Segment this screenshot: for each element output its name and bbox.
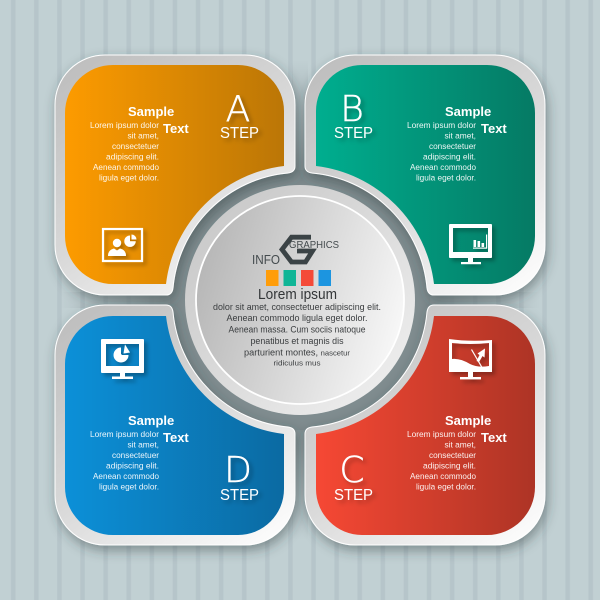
panel: step B	[305, 55, 545, 295]
logo word info: INFO	[252, 252, 280, 267]
D heading	[128, 413, 189, 445]
A body text: Aenean commodo	[93, 162, 159, 172]
central circle	[185, 185, 415, 415]
C heading: Text	[481, 430, 507, 445]
C body text: ligula eget dolor.	[416, 482, 476, 492]
A step label: STEP	[220, 125, 259, 142]
icon: monitor with arrow	[449, 339, 492, 379]
D step label: D	[224, 450, 252, 491]
B frame	[305, 55, 545, 295]
A heading	[128, 104, 189, 136]
D heading: Text	[163, 430, 189, 445]
logo: info graphics	[282, 237, 339, 262]
C step label: C	[339, 450, 365, 491]
B heading: Sample	[445, 104, 491, 119]
A step label	[220, 89, 259, 142]
D heading: Sample	[128, 413, 174, 428]
D body text: Aenean commodo	[93, 471, 159, 481]
A heading: Sample	[128, 104, 174, 119]
A heading: Text	[163, 121, 189, 136]
B body text: ligula eget dolor.	[416, 172, 476, 182]
icon: monitor with pie chart	[101, 339, 144, 379]
B body text: sit amet,	[444, 130, 476, 140]
inner disc	[196, 196, 404, 404]
panel: step D	[55, 305, 295, 545]
C step label: STEP	[334, 487, 373, 504]
D body text: adipiscing elit.	[106, 460, 159, 470]
D body text: ligula eget dolor.	[99, 482, 159, 492]
B body text: adipiscing elit.	[423, 152, 476, 162]
B body text: consectetuer	[429, 141, 476, 151]
icon: presentation board	[103, 229, 142, 261]
A body text	[90, 120, 159, 182]
A step label: A	[226, 89, 250, 130]
dark channel between panels	[60, 60, 540, 540]
C colour fill	[316, 316, 535, 535]
B colour fill	[316, 65, 535, 284]
D colour fill	[65, 316, 284, 535]
C heading	[445, 413, 507, 445]
C body text: Aenean commodo	[410, 471, 476, 481]
C body text: consectetuer	[429, 450, 476, 460]
B step label: B	[340, 89, 364, 130]
centre body text: Aenean commodo ligula eget dolor.	[226, 313, 368, 323]
A colour fill	[65, 65, 284, 284]
C body text	[407, 429, 476, 492]
D body text: consectetuer	[112, 450, 159, 460]
A body text: adipiscing elit.	[106, 152, 159, 162]
B step label: STEP	[334, 125, 373, 142]
B body text: Lorem ipsum dolor	[407, 120, 476, 130]
B heading	[445, 104, 507, 136]
C body text: sit amet,	[444, 440, 476, 450]
centre body text: dolor sit amet, consectetuer adipiscing elit.	[213, 302, 381, 312]
centre body text: parturient montes, nascetur	[244, 348, 350, 358]
D step label	[220, 450, 259, 504]
D step label: STEP	[220, 487, 259, 504]
D body text: sit amet,	[128, 440, 159, 450]
centre body text	[213, 302, 381, 367]
centre body text: ridiculus mus	[274, 358, 321, 367]
logo word graphics: GRAPHICS	[289, 239, 339, 251]
B step label	[334, 89, 373, 142]
A body text: ligula eget dolor.	[99, 172, 159, 182]
panel: step A	[55, 55, 295, 295]
logo hexagon G	[282, 237, 312, 262]
centre heading: Lorem ipsum	[258, 287, 337, 303]
C frame	[305, 305, 545, 545]
A frame	[55, 55, 295, 295]
D frame	[55, 305, 295, 545]
A body text: Lorem ipsum dolor	[90, 120, 159, 130]
colour swatches	[266, 270, 331, 286]
D body text	[90, 429, 159, 492]
B body text: Aenean commodo	[410, 162, 476, 172]
B body text	[407, 120, 476, 182]
C step label	[334, 450, 373, 504]
A body text: consectetuer	[112, 141, 159, 151]
outer ring	[185, 185, 415, 415]
icon: monitor with bar chart	[449, 224, 492, 264]
centre body text: Aenean massa. Cum sociis natoque	[228, 325, 366, 335]
panel: step C	[305, 305, 545, 545]
centre body text: penatibus et magnis dis	[250, 336, 344, 346]
A body text: sit amet,	[128, 130, 159, 140]
C heading: Sample	[445, 413, 491, 428]
C body text: Lorem ipsum dolor	[407, 429, 476, 439]
D body text: Lorem ipsum dolor	[90, 429, 159, 439]
C body text: adipiscing elit.	[423, 460, 476, 470]
B heading: Text	[481, 121, 507, 136]
